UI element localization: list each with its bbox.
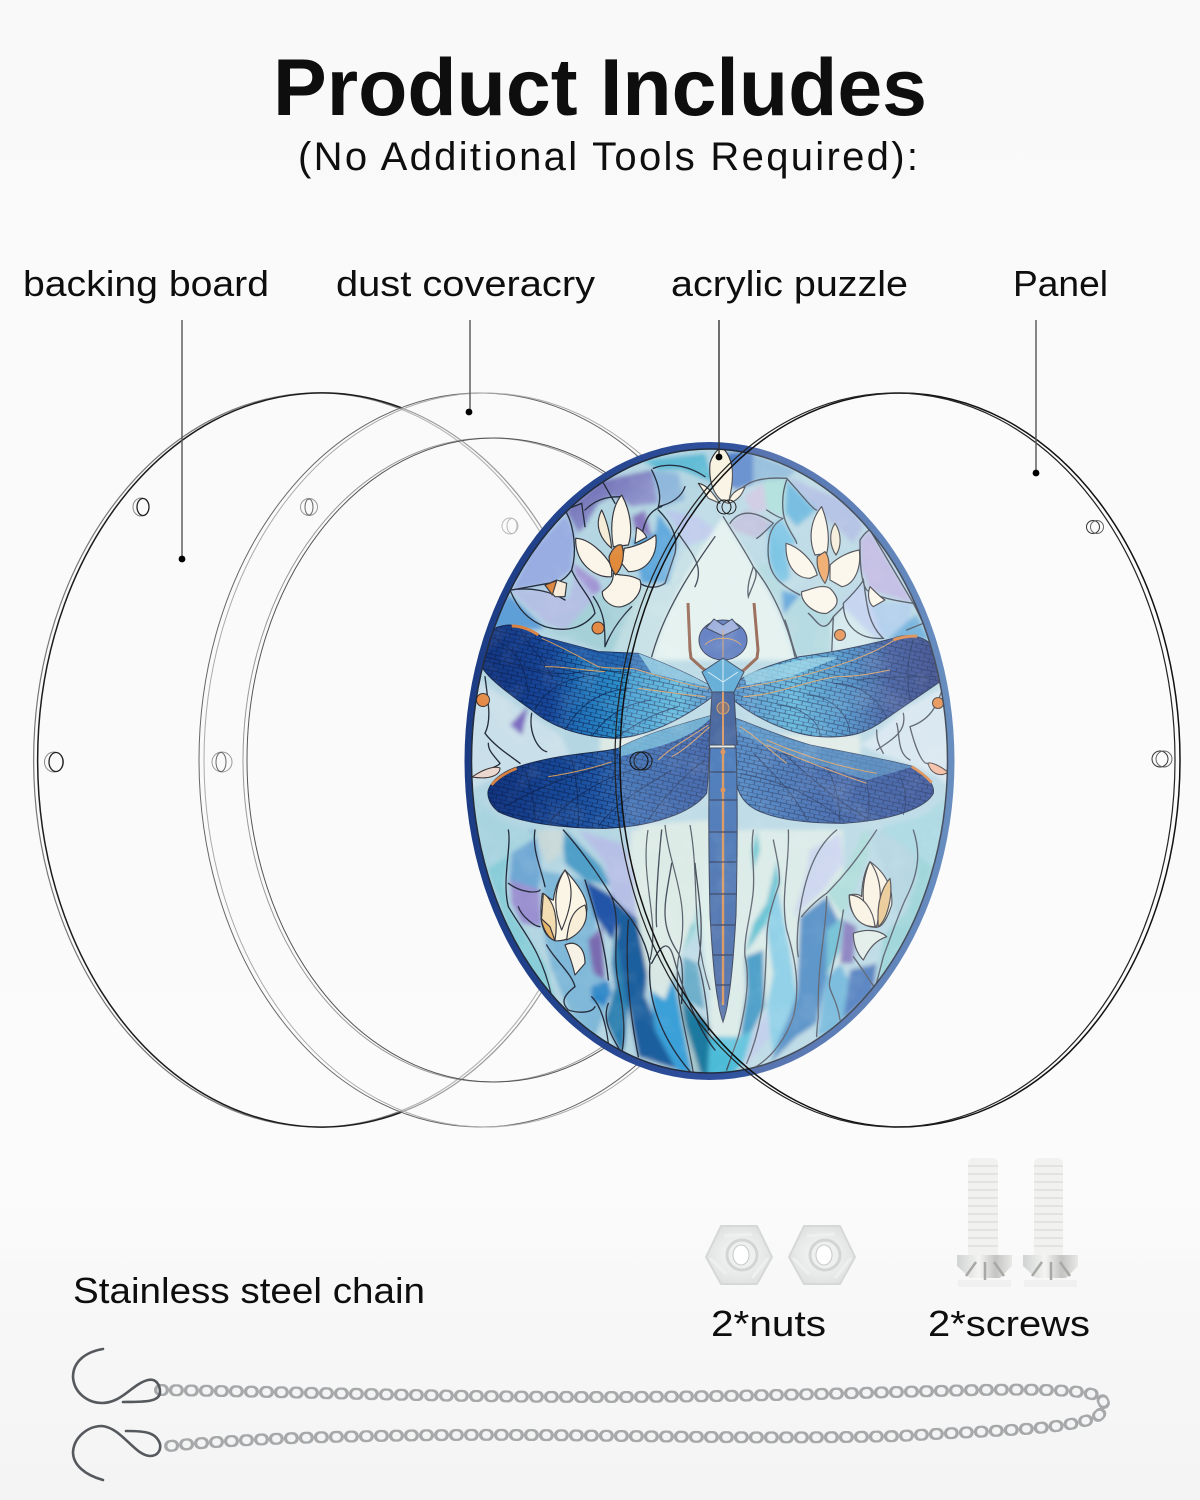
wings: right pair [730,636,943,823]
lead lines: upper left [510,465,715,657]
flower: top center bud [698,447,745,503]
lead lines: lower left [506,830,715,1073]
lead lines: beside wings [484,676,548,768]
orange berries and buds [472,622,948,778]
subtitle: (No Additional Tools Required): [298,135,918,179]
icon: nuts [706,1226,855,1284]
icon: stainless steel chain with hooks [73,1349,1104,1480]
label: backing board: backing board [23,263,269,304]
leader line: panel [1033,320,1039,476]
lead lines: right of wings [785,620,947,773]
icon: screws [957,1158,1078,1287]
acrylic puzzle: dragonfly stained glass [460,440,960,1090]
front panel disc [615,393,1180,1127]
flower: upper right [786,507,885,613]
title: Product Includes [273,43,927,133]
backing board disc [34,393,606,1127]
leader line: acrylic puzzle [716,320,722,460]
label: panel: Panel [1013,263,1108,304]
lead lines: upper right [723,478,923,657]
center streak lines [646,825,710,1085]
lead lines: lower right [727,830,918,1070]
label: nuts: 2*nuts [711,1303,826,1344]
flower: lower right bud [849,862,892,960]
mottled watercolor texture [484,460,936,1064]
wings: left pair [480,625,715,828]
label: chain: Stainless steel chain [73,1270,425,1311]
label: dust cover: dust coveracry [336,263,595,304]
leader line: dust cover [466,320,472,415]
leader line: backing board [179,320,185,562]
flower: upper left [545,495,656,607]
dragonfly body [688,603,758,1022]
dust cover ring [199,393,766,1127]
label: screws: 2*screws [928,1303,1090,1344]
flower: lower left bud [541,870,587,975]
flowers [541,447,892,975]
glass: blended watercolor base [460,440,960,1090]
label: acrylic puzzle: acrylic puzzle [671,263,908,304]
